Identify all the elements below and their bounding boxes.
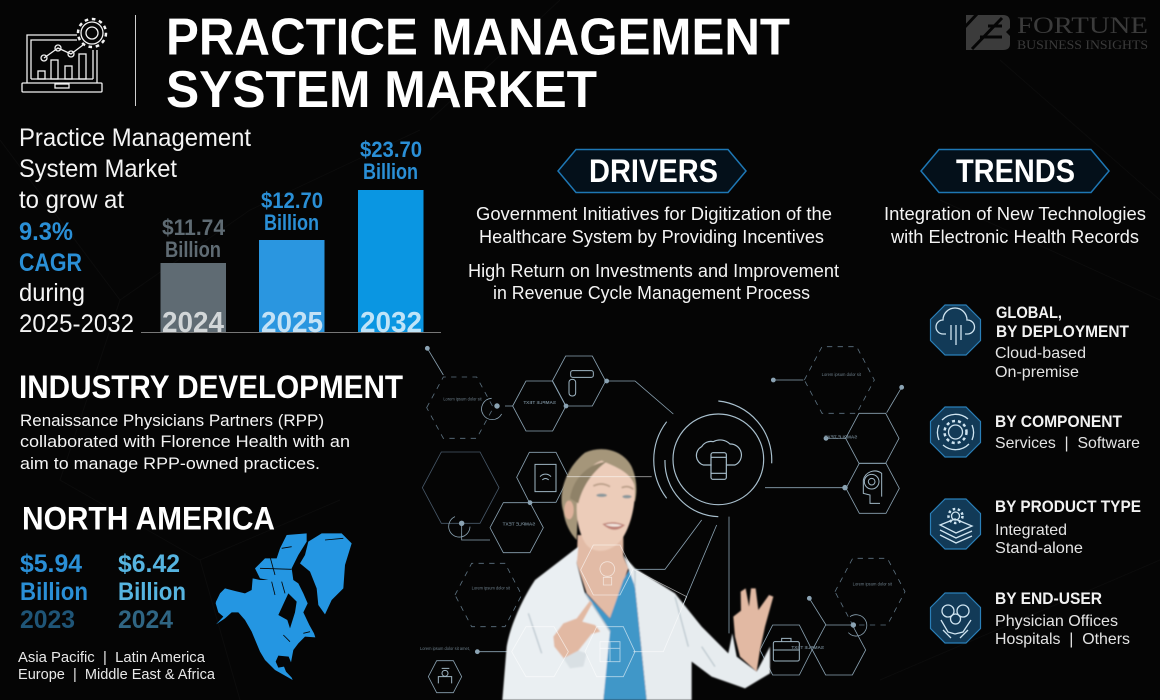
panel: drivers: in Revenue Cycle Management Process (493, 283, 810, 303)
sample text labels: SAMPLE TEXT (791, 645, 824, 650)
panel: industry development: aim to manage RPP-owned practices. (20, 454, 320, 473)
sample text labels: Lorem ipsum dolor sit (443, 397, 482, 402)
sample text labels: Lorem ipsum dolor sit (472, 585, 511, 590)
scrubs (584, 568, 647, 700)
growth statement: 2025-2032 (19, 310, 134, 338)
panel: drivers: Healthcare System by Providing Incentives (479, 227, 824, 247)
title: PRACTICE MANAGEMENT (166, 8, 790, 66)
bar chart: market size: 2025 (261, 307, 323, 339)
segment: by end-user: BY END-USER (995, 589, 1102, 608)
panel: north america: Billion (118, 578, 186, 606)
panel: trends: TRENDS (956, 153, 1075, 189)
header divider (134, 15, 136, 106)
panel: north america: Europe | Middle East & Africa (18, 666, 216, 683)
center illustration: holographic network (420, 346, 905, 700)
panel: industry development: collaborated with Florence Health with an (20, 432, 350, 451)
segment: global by deployment: GLOBAL, (996, 303, 1062, 322)
segment: by component: Services | Software (995, 435, 1140, 452)
segment: by product type: BY PRODUCT TYPE (995, 497, 1141, 516)
white coat: left side (502, 547, 610, 700)
growth statement: 9.3% (19, 218, 73, 246)
panel: trends (884, 150, 1146, 247)
bar chart: market size: 2024 (162, 307, 224, 339)
panel: trends: with Electronic Health Records (890, 227, 1139, 247)
panel: drivers: High Return on Investments and Improvement (468, 261, 839, 281)
growth statement: System Market (19, 155, 177, 183)
growth statement: to grow at (19, 186, 124, 214)
bar chart: market size: $23.70 (360, 137, 422, 162)
segment: by component (930, 407, 1140, 457)
segment: by product type: Integrated (995, 522, 1067, 539)
left hand (553, 601, 600, 660)
growth statement: during (19, 279, 85, 307)
header icon: laptop with chart and gear (22, 19, 106, 92)
bar chart: market size: $11.74 (162, 215, 226, 240)
right hand (733, 588, 773, 672)
bar chart: market size: Billion (264, 210, 319, 235)
bar chart: market size (141, 137, 441, 339)
logo: Fortune Business Insights (963, 13, 1148, 52)
sample text labels: SAMPLE TEXT (825, 434, 857, 439)
bar chart: market size: 2032 (360, 307, 422, 339)
holographic overlay on doctor (512, 477, 687, 677)
left sleeve cuff (563, 651, 587, 668)
growth statement: Practice Management (19, 124, 251, 152)
logo: Fortune Business Insights: BUSINESS INSIGHTS (1017, 37, 1148, 52)
segment: by product type (930, 497, 1141, 557)
panel: north america: Billion (20, 578, 88, 606)
panel: drivers: Government Initiatives for Digitization of the (476, 204, 832, 224)
bar chart: market size: Billion (165, 237, 221, 262)
neck (577, 535, 628, 618)
segment: by end-user (930, 589, 1130, 648)
growth statement (19, 124, 251, 338)
bar chart: market size: $12.70 (261, 188, 323, 213)
network connectors (425, 346, 904, 654)
title (166, 8, 790, 119)
hexagon icons (438, 371, 882, 683)
logo: Fortune Business Insights: FORTUNE (1017, 13, 1148, 38)
panel: north america: $6.42 (118, 550, 180, 578)
doctor figure (502, 449, 773, 700)
title: SYSTEM MARKET (166, 61, 597, 119)
sample text labels: Lorem ipsum dolor sit amet, (420, 646, 470, 651)
segment: by product type: Stand-alone (995, 540, 1083, 557)
panel: drivers: DRIVERS (589, 153, 718, 189)
network hexagons (422, 347, 905, 693)
face (577, 461, 635, 551)
panel: north america: $5.94 (20, 550, 82, 578)
panel: trends: Integration of New Technologies (884, 204, 1146, 224)
sample text labels: SAMPLE TEXT (523, 400, 556, 405)
panel: drivers (468, 150, 839, 303)
panel: industry development (19, 369, 403, 473)
growth statement: CAGR (19, 249, 82, 277)
panel: north america: NORTH AMERICA (22, 500, 275, 536)
panel: north america: 2024 (118, 606, 173, 634)
map: north america (216, 533, 352, 680)
segment: by end-user: Hospitals | Others (995, 631, 1130, 648)
panel: north america: 2023 (20, 606, 75, 634)
hub: cloud and phone (654, 401, 772, 517)
panel: north america (18, 500, 275, 683)
panel: industry development: INDUSTRY DEVELOPMENT (19, 369, 403, 405)
segment: global by deployment: BY DEPLOYMENT (996, 322, 1130, 341)
segment: global by deployment: On-premise (995, 364, 1079, 381)
sample text labels: Lorem ipsum dolor sit (822, 372, 862, 377)
segment: global by deployment (930, 303, 1130, 381)
panel: industry development: Renaissance Physicians Partners (RPP) (20, 411, 324, 430)
segment: global by deployment: Cloud-based (995, 345, 1086, 362)
white coat: right side and sleeve (623, 555, 770, 700)
sample text labels: Lorem ipsum dolor sit (853, 581, 893, 586)
hair (562, 449, 636, 540)
segment: by component: BY COMPONENT (995, 412, 1123, 431)
panel: north america: Asia Pacific | Latin America (18, 649, 206, 666)
segment: by end-user: Physician Offices (995, 613, 1118, 630)
bar chart: market size: Billion (363, 159, 418, 184)
sample text labels: SAMPLE TEXT (503, 521, 535, 526)
sample text labels (420, 372, 893, 651)
